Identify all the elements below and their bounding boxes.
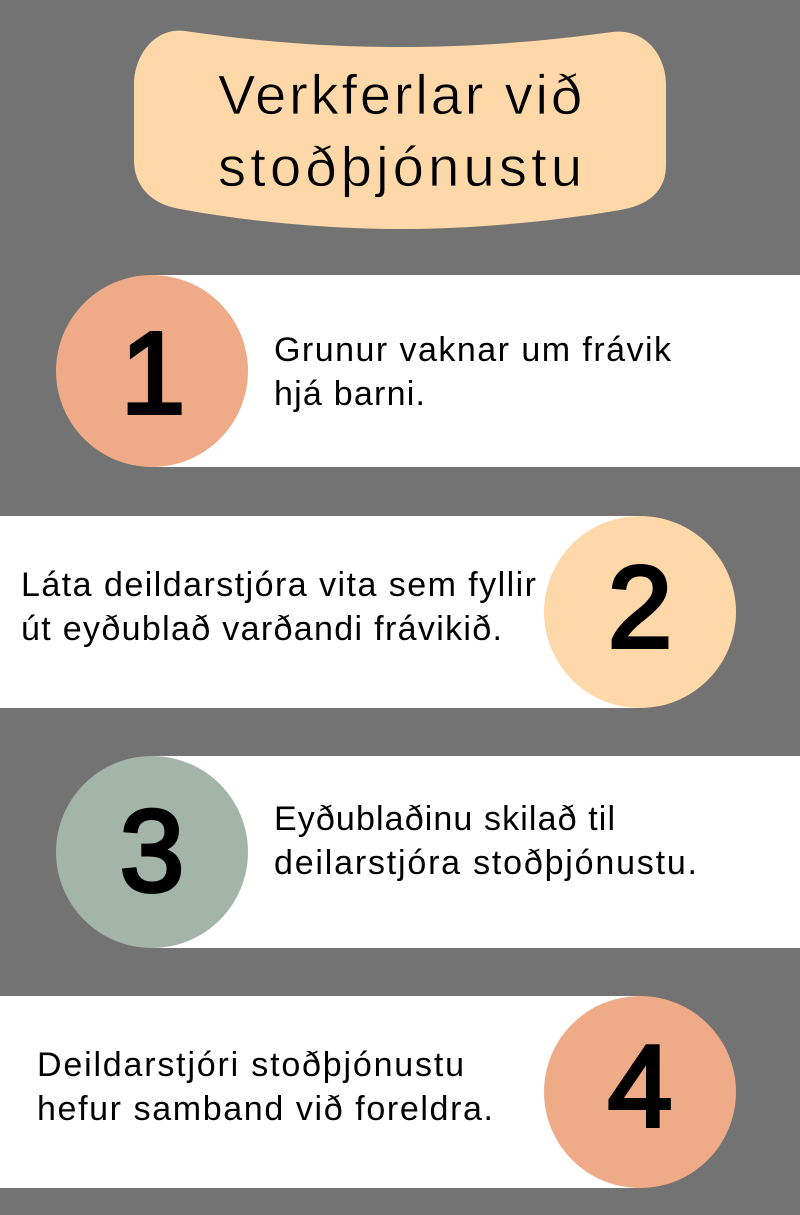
title text: stoðþjónustu (218, 135, 582, 198)
step 4 text: hefur samband við foreldra. (37, 1090, 493, 1128)
title banner (134, 31, 666, 229)
step 1 circle badge: 1 (121, 308, 185, 438)
step 2 text (21, 566, 536, 648)
step 4 text (37, 1046, 493, 1128)
step 4 panel (0, 996, 736, 1188)
step 2 circle badge: 2 (608, 542, 672, 672)
step 1 circle badge (56, 275, 248, 467)
step 3 text: deilarstjóra stoðþjónustu. (274, 844, 697, 882)
step 1 text (274, 331, 672, 413)
step 3 circle badge: 3 (120, 786, 184, 916)
step 2 text: Láta deildarstjóra vita sem fyllir (21, 566, 536, 604)
title text (218, 63, 582, 198)
step 1 text: hjá barni. (274, 375, 425, 413)
step 2 panel (0, 516, 736, 708)
step 4 text: Deildarstjóri stoðþjónustu (37, 1046, 464, 1084)
step 2 circle badge (544, 516, 736, 708)
step 1 text: Grunur vaknar um frávik (274, 331, 672, 369)
step 3 circle badge (56, 756, 248, 948)
title text: Verkferlar við (218, 63, 582, 126)
step 3 panel (56, 756, 800, 948)
step 2 text: út eyðublað varðandi frávikið. (21, 610, 502, 648)
step 1 panel (56, 275, 800, 467)
step 4 circle badge: 4 (608, 1021, 672, 1151)
step 4 circle badge (544, 996, 736, 1188)
step 3 text (274, 800, 697, 882)
step 3 text: Eyðublaðinu skilað til (274, 800, 615, 838)
